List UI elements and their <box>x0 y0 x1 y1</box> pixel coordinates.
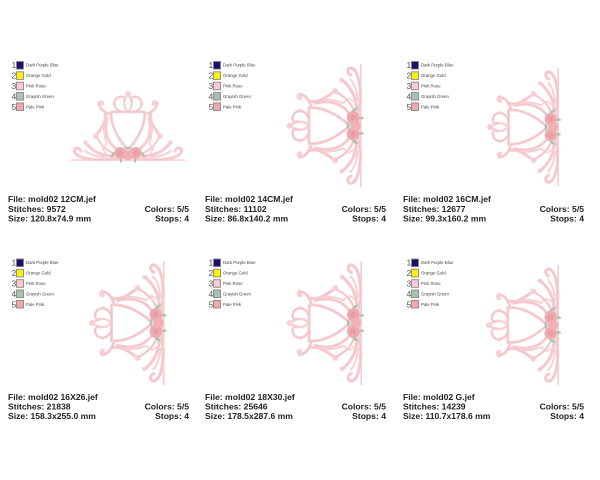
file details: Colors: 5/5 <box>342 402 386 412</box>
embroidery motif: horizontal crest <box>71 91 185 163</box>
file details: Stitches: 21838 <box>8 402 71 412</box>
file details: Size: 86.8x140.2 mm <box>205 214 288 224</box>
file details: File: mold02 14CM.jef <box>205 194 293 204</box>
file details: Stops: 4 <box>550 411 584 421</box>
file details: Size: 99.3x160.2 mm <box>403 214 486 224</box>
embroidery motif: side crest <box>287 261 364 385</box>
file details: Colors: 5/5 <box>145 402 189 412</box>
legend: thread colours <box>406 258 454 310</box>
file details: Colors: 5/5 <box>145 204 189 214</box>
file details: Stops: 4 <box>155 411 189 421</box>
panel: mold02 18X30 <box>205 258 386 421</box>
panel: mold02 12CM <box>8 60 189 224</box>
file details <box>403 194 584 224</box>
file details: Size: 178.5x287.6 mm <box>205 411 293 421</box>
panel: mold02 14CM <box>205 60 386 224</box>
file details: File: mold02 16X26.jef <box>8 392 98 402</box>
file details: Colors: 5/5 <box>540 402 584 412</box>
embroidery motif: side crest <box>89 261 167 385</box>
embroidery motif: side crest <box>287 64 364 187</box>
file details <box>403 392 584 421</box>
legend: thread colours <box>406 60 454 112</box>
file details: File: mold02 16CM.jef <box>403 194 491 204</box>
file details: Size: 158.3x255.0 mm <box>8 411 96 421</box>
legend: thread colours <box>208 258 256 310</box>
file details <box>8 194 189 224</box>
legend: thread colours <box>12 258 59 310</box>
file details: File: mold02 18X30.jef <box>205 392 295 402</box>
file details: Size: 120.8x74.9 mm <box>8 214 91 224</box>
file details <box>205 392 386 421</box>
legend: thread colours <box>208 60 256 112</box>
file details: File: mold02 G.jef <box>403 392 475 402</box>
panel: mold02 16CM <box>403 60 584 224</box>
file details: Stops: 4 <box>352 214 386 224</box>
panel: mold02 G <box>403 258 584 421</box>
file details: Stops: 4 <box>155 214 189 224</box>
file details: File: mold02 12CM.jef <box>8 194 96 204</box>
file details: Size: 110.7x178.6 mm <box>403 411 491 421</box>
file details: Stops: 4 <box>352 411 386 421</box>
file details: Stops: 4 <box>550 214 584 224</box>
file details: Stitches: 11102 <box>205 204 267 214</box>
legend: thread colours <box>12 60 59 112</box>
file details: Stitches: 14239 <box>403 402 466 412</box>
file details: Stitches: 25646 <box>205 402 268 412</box>
embroidery motif: side crest <box>487 68 561 186</box>
file details <box>205 194 386 224</box>
file details <box>8 392 189 421</box>
embroidery motif: side crest <box>486 265 561 385</box>
file details: Stitches: 12677 <box>403 204 466 214</box>
file details: Stitches: 9572 <box>8 204 66 214</box>
file details: Colors: 5/5 <box>540 204 584 214</box>
file details: Colors: 5/5 <box>342 204 386 214</box>
panel: mold02 16X26 <box>8 258 189 421</box>
